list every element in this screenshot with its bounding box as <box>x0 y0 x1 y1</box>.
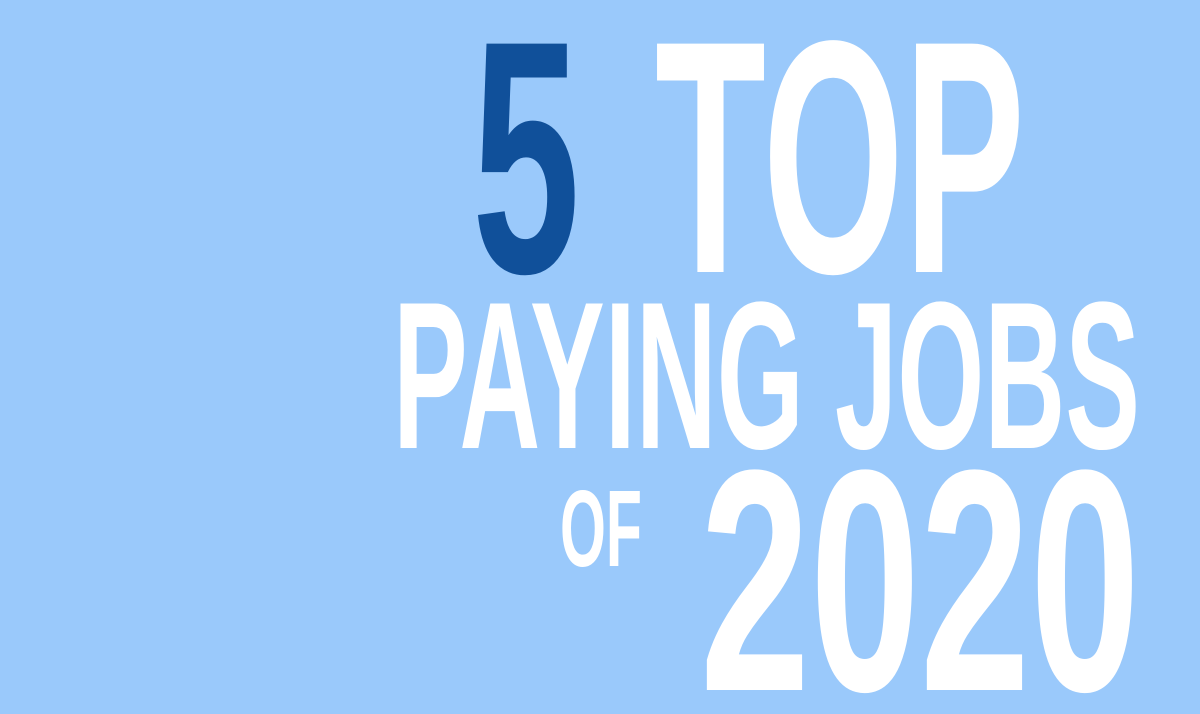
word OF: OF <box>560 468 642 590</box>
title: 5 TOP PAYING JOBS OF 2020 <box>393 0 1140 714</box>
